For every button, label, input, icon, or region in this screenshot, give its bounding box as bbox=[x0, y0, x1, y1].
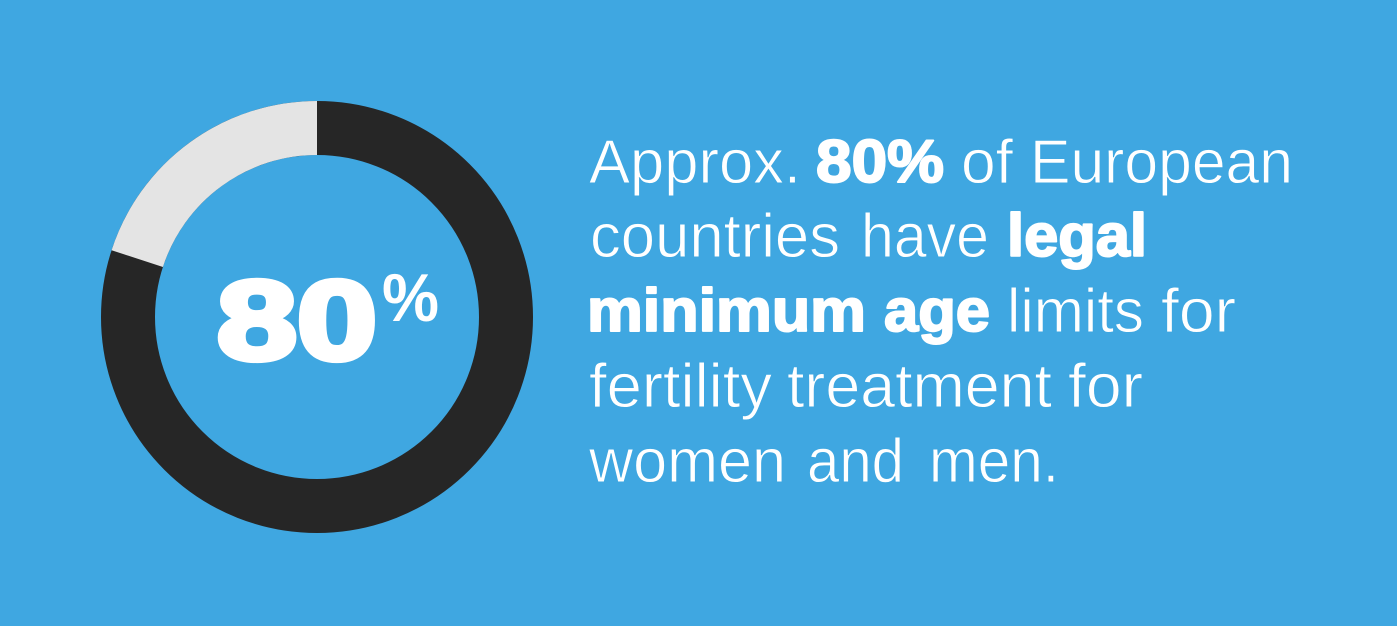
text block: description: of bbox=[961, 128, 1014, 197]
donut value: 80%: % bbox=[382, 260, 439, 336]
text block: description: for bbox=[1068, 352, 1143, 421]
text block: description: age bbox=[884, 277, 990, 344]
text block: description: limits bbox=[1007, 277, 1144, 346]
text block: description: and bbox=[807, 427, 904, 496]
text block: description: for bbox=[1161, 277, 1236, 346]
donut chart: 80 percent bbox=[128, 128, 506, 506]
donut value: 80%: 80 bbox=[217, 258, 377, 383]
text block: description: 80% bbox=[816, 128, 944, 195]
text block: description: legal bbox=[1007, 202, 1147, 269]
text block: description: women bbox=[588, 427, 786, 496]
text block: description: men. bbox=[929, 427, 1059, 496]
text block: description bbox=[587, 128, 1293, 496]
text block: description: countries bbox=[590, 202, 840, 271]
text block: description: European bbox=[1030, 128, 1293, 197]
text block: description: treatment bbox=[787, 352, 1052, 421]
donut value: 80% bbox=[217, 258, 439, 383]
text block: description: minimum bbox=[587, 277, 866, 344]
text block: description: fertility bbox=[589, 352, 772, 421]
text block: description: have bbox=[861, 202, 989, 271]
text block: description: Approx. bbox=[589, 128, 801, 197]
